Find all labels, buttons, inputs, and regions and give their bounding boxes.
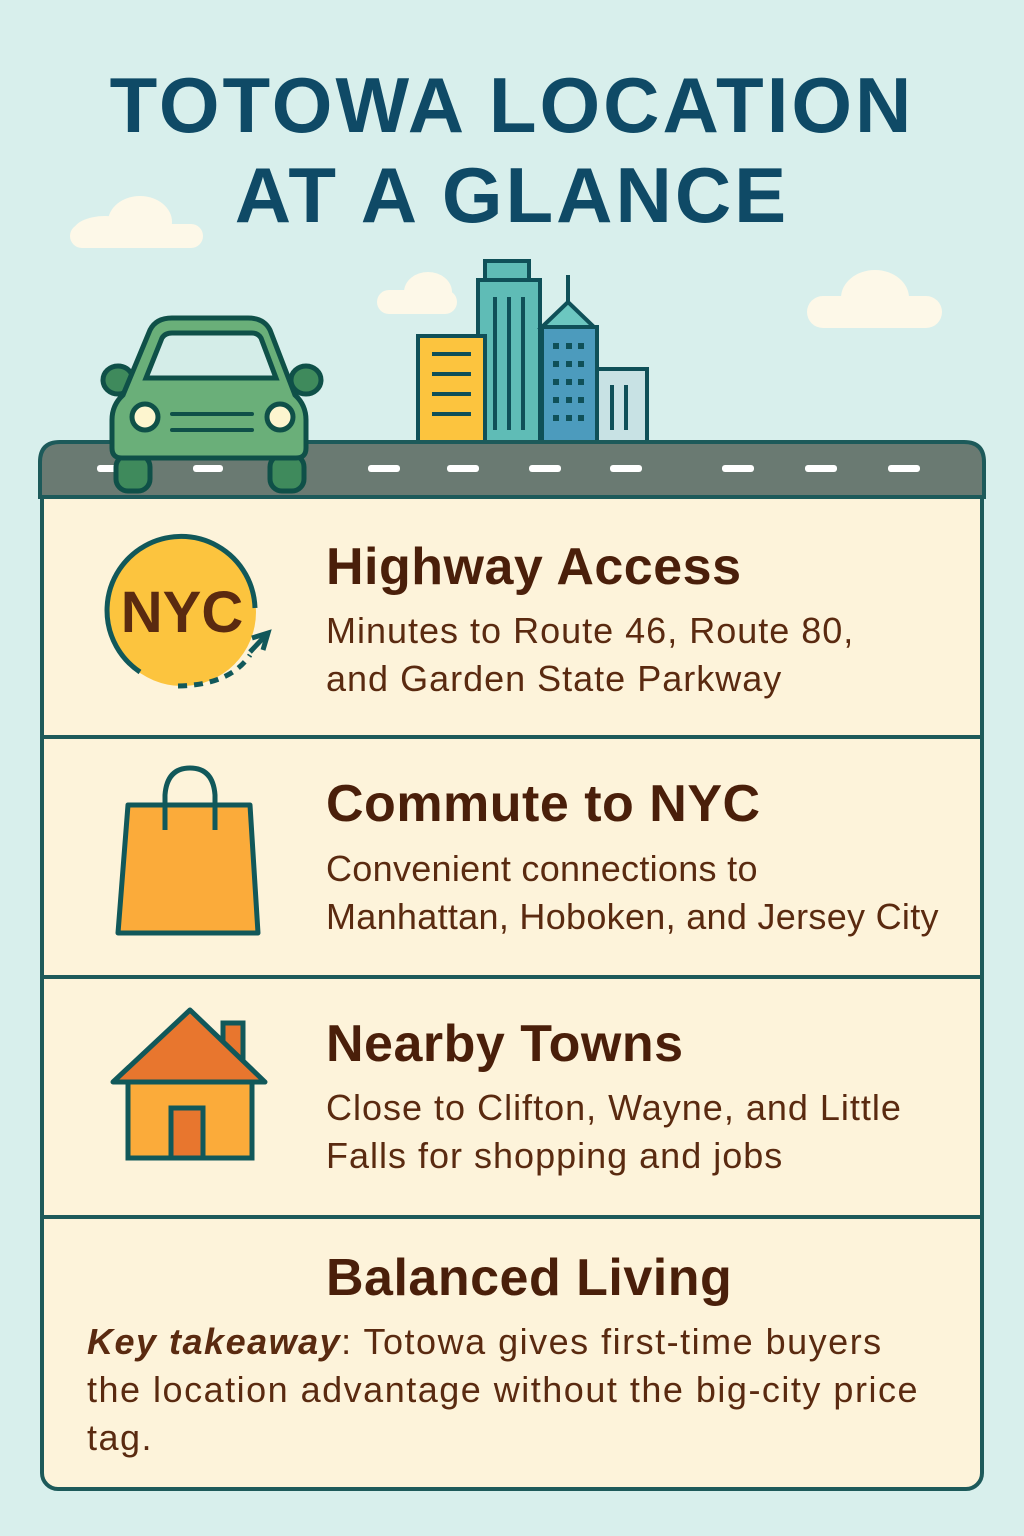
text: tag. [87, 1417, 153, 1458]
icon: house [110, 1008, 268, 1160]
text: Falls for shopping and jobs [326, 1135, 783, 1176]
text: highway access [326, 538, 854, 699]
cloud right [807, 270, 942, 328]
car [103, 318, 321, 491]
text: Manhattan, Hoboken, and Jersey City [326, 896, 939, 937]
dividers [40, 735, 984, 739]
road [40, 442, 984, 497]
icon: NYC circle [104, 534, 272, 688]
icon: shopping bag [116, 766, 260, 936]
text: Commute to NYC [326, 775, 761, 833]
text: Minutes to Route 46, Route 80, [326, 610, 854, 651]
city buildings [418, 261, 647, 442]
text: nearby towns [326, 1015, 902, 1176]
text: balanced living [87, 1249, 919, 1458]
text: Highway Access [326, 538, 741, 596]
panel: list card [40, 495, 984, 1491]
text: Nearby Towns [326, 1015, 684, 1073]
text: Close to Clifton, Wayne, and Little [326, 1087, 902, 1128]
icon: NYC circle: NYC [121, 580, 243, 645]
text: commute [326, 775, 939, 937]
title: AT A GLANCE [235, 151, 789, 239]
title [110, 61, 914, 239]
text: Balanced Living [326, 1249, 732, 1307]
text: Key takeaway: Totowa gives first-time buyers [87, 1321, 883, 1362]
text: the location advantage without the big-city price [87, 1369, 919, 1410]
title: TOTOWA LOCATION [110, 61, 914, 149]
text: and Garden State Parkway [326, 658, 782, 699]
cloud middle [377, 272, 457, 314]
text: Convenient connections to [326, 848, 758, 889]
cloud left [70, 196, 203, 248]
